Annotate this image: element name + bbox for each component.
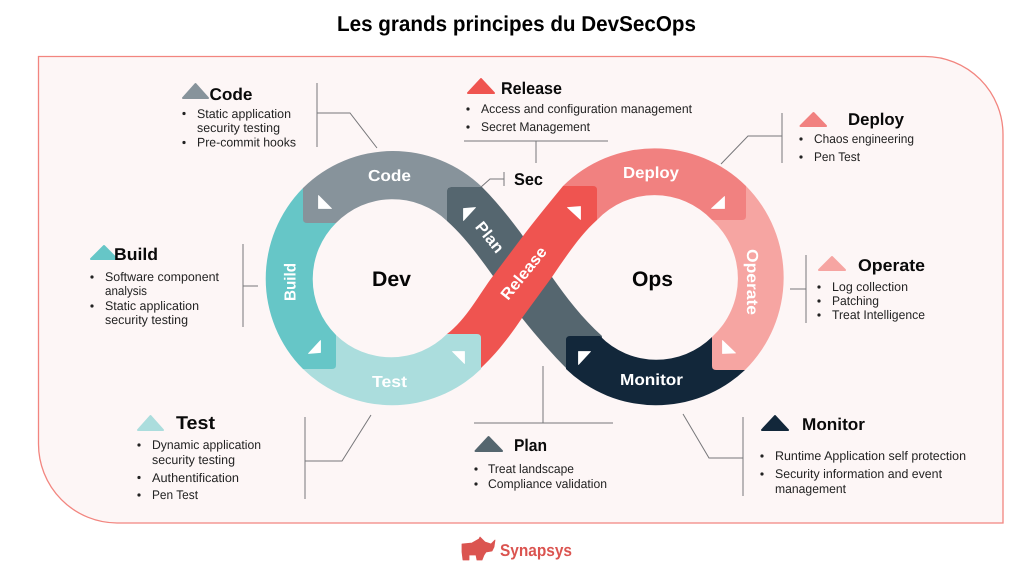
callout: Release: [464, 79, 693, 163]
callout: Deploy: Deploy: [848, 110, 905, 129]
callout: Test: Pen Test: [152, 488, 198, 502]
segment labels: Release: [498, 244, 551, 304]
callout: Build: security testing: [105, 313, 188, 327]
callout: Release: Release: [501, 79, 562, 98]
callout: Plan: Plan: [514, 436, 547, 455]
callout: Build: Software component: [105, 270, 220, 284]
callout: Monitor: Monitor: [802, 415, 865, 434]
callout: Plan: Treat landscape: [488, 462, 574, 476]
segment labels: [282, 165, 760, 391]
segment labels: Test: [372, 374, 408, 391]
segment labels: Deploy: [623, 165, 679, 182]
callout: Test: Authentification: [152, 471, 239, 485]
callout: Code: Pre-commit hooks: [197, 136, 296, 150]
title: Les grands principes du DevSecOps: [337, 12, 696, 36]
callout: Code: [182, 83, 377, 150]
callout: Operate: [790, 255, 925, 323]
callout: Test: [137, 412, 371, 502]
callout: Operate: Treat Intelligence: [832, 308, 925, 322]
callout: Build: Build: [114, 245, 158, 264]
callout: Deploy: [721, 110, 914, 164]
infinity loop diagram: [266, 148, 784, 405]
callout: Operate: Patching: [832, 294, 879, 308]
segment: Monitor: [566, 336, 745, 405]
callout: Sec: Sec: [514, 170, 543, 189]
segment labels: Monitor: [620, 372, 683, 389]
callout: Build: Static application: [105, 299, 199, 313]
callout: Monitor: [683, 414, 966, 496]
label: Dev: Dev: [372, 268, 411, 291]
segment: Code: [303, 151, 482, 223]
callout: Test: security testing: [152, 453, 235, 467]
segment: Deploy: [563, 148, 746, 220]
segment: Plan band: [447, 187, 602, 372]
callout: Plan: [474, 366, 613, 491]
callout: Operate: Log collection: [832, 280, 908, 294]
callout: Monitor: Security information and event: [775, 467, 943, 481]
segment: Release band: [447, 186, 597, 368]
logo: Synapsys: [462, 537, 572, 560]
segment: Operate: [712, 186, 784, 370]
callout: Test: Test: [176, 412, 215, 433]
callout: Sec: [481, 170, 543, 189]
segment labels: Operate: [743, 249, 760, 315]
panel: background: [38, 56, 1003, 523]
callout: Build: [90, 244, 258, 327]
callout: Release: Secret Management: [481, 120, 591, 134]
callout: Code: Code: [210, 85, 252, 104]
callout: Operate: Operate: [858, 256, 925, 275]
callout: Plan: Compliance validation: [488, 477, 607, 491]
callout: Monitor: management: [775, 482, 847, 496]
callout: Release: Access and configuration management: [481, 102, 693, 116]
logo: Synapsys: Synapsys: [500, 541, 572, 560]
segment labels: Build: [282, 263, 300, 301]
callout: Build: analysis: [105, 284, 147, 298]
callout: Code: security testing: [197, 121, 280, 135]
callout: Deploy: Pen Test: [814, 150, 860, 164]
segment labels: Code: [368, 168, 411, 185]
segment: Test: [303, 334, 481, 405]
direction arrows: [308, 196, 736, 364]
segment labels: Plan: [471, 219, 507, 257]
label: Ops: Ops: [632, 268, 673, 291]
callout: Monitor: Runtime Application self protection: [775, 449, 966, 463]
segment: Build: [266, 188, 336, 369]
callout: Test: Dynamic application: [152, 438, 261, 452]
callout: Deploy: Chaos engineering: [814, 132, 914, 146]
callout: Code: Static application: [197, 107, 291, 121]
